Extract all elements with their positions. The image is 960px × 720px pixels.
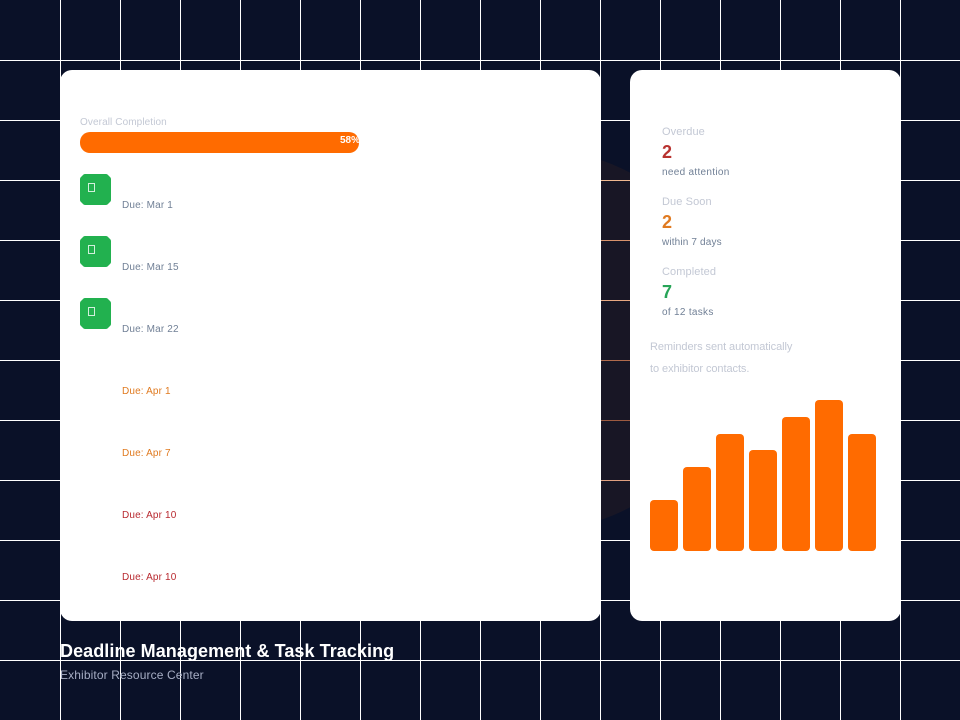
tinted grid lines inside the glow: [601, 180, 630, 481]
overdue stat: Overdue: [662, 126, 705, 138]
task 3 check icon: [80, 298, 111, 329]
reminder note: [650, 341, 792, 375]
subtitle: Exhibitor Resource Center: [60, 668, 204, 682]
title: Deadline Management & Task Tracking: [60, 641, 394, 661]
task 5 due date: Due: Apr 7: [122, 448, 171, 459]
orange glow: [350, 150, 730, 530]
task 2 check icon: [80, 236, 111, 267]
overdue stat: 2: [662, 142, 672, 162]
reminder note: Reminders sent automatically: [650, 341, 792, 353]
task 7 due date: Due: Apr 10: [122, 572, 176, 583]
task 2 due date: Due: Mar 15: [122, 262, 179, 273]
panel: task list: [60, 70, 601, 621]
task 6 due date: Due: Apr 10: [122, 510, 176, 521]
task 1 due date: Due: Mar 1: [122, 200, 173, 211]
task 4 due date: Due: Apr 1: [122, 386, 171, 397]
progress bar: [80, 132, 359, 153]
due soon stat: 2: [662, 212, 672, 232]
completed stat: 7: [662, 282, 672, 302]
completed stat: [662, 266, 716, 318]
due soon stat: Due Soon: [662, 196, 712, 208]
bar chart: [650, 400, 876, 551]
overall completion label: Overall Completion: [80, 117, 167, 128]
completed stat: of 12 tasks: [662, 307, 714, 318]
panel: summary: [630, 70, 901, 621]
due soon stat: [662, 196, 722, 248]
due soon stat: within 7 days: [662, 237, 722, 248]
task 3 due date: Due: Mar 22: [122, 324, 179, 335]
completed stat: Completed: [662, 266, 716, 278]
reminder note: to exhibitor contacts.: [650, 363, 749, 375]
overdue stat: need attention: [662, 167, 730, 178]
task 1 check icon: [80, 174, 111, 205]
overdue stat: [662, 126, 730, 178]
